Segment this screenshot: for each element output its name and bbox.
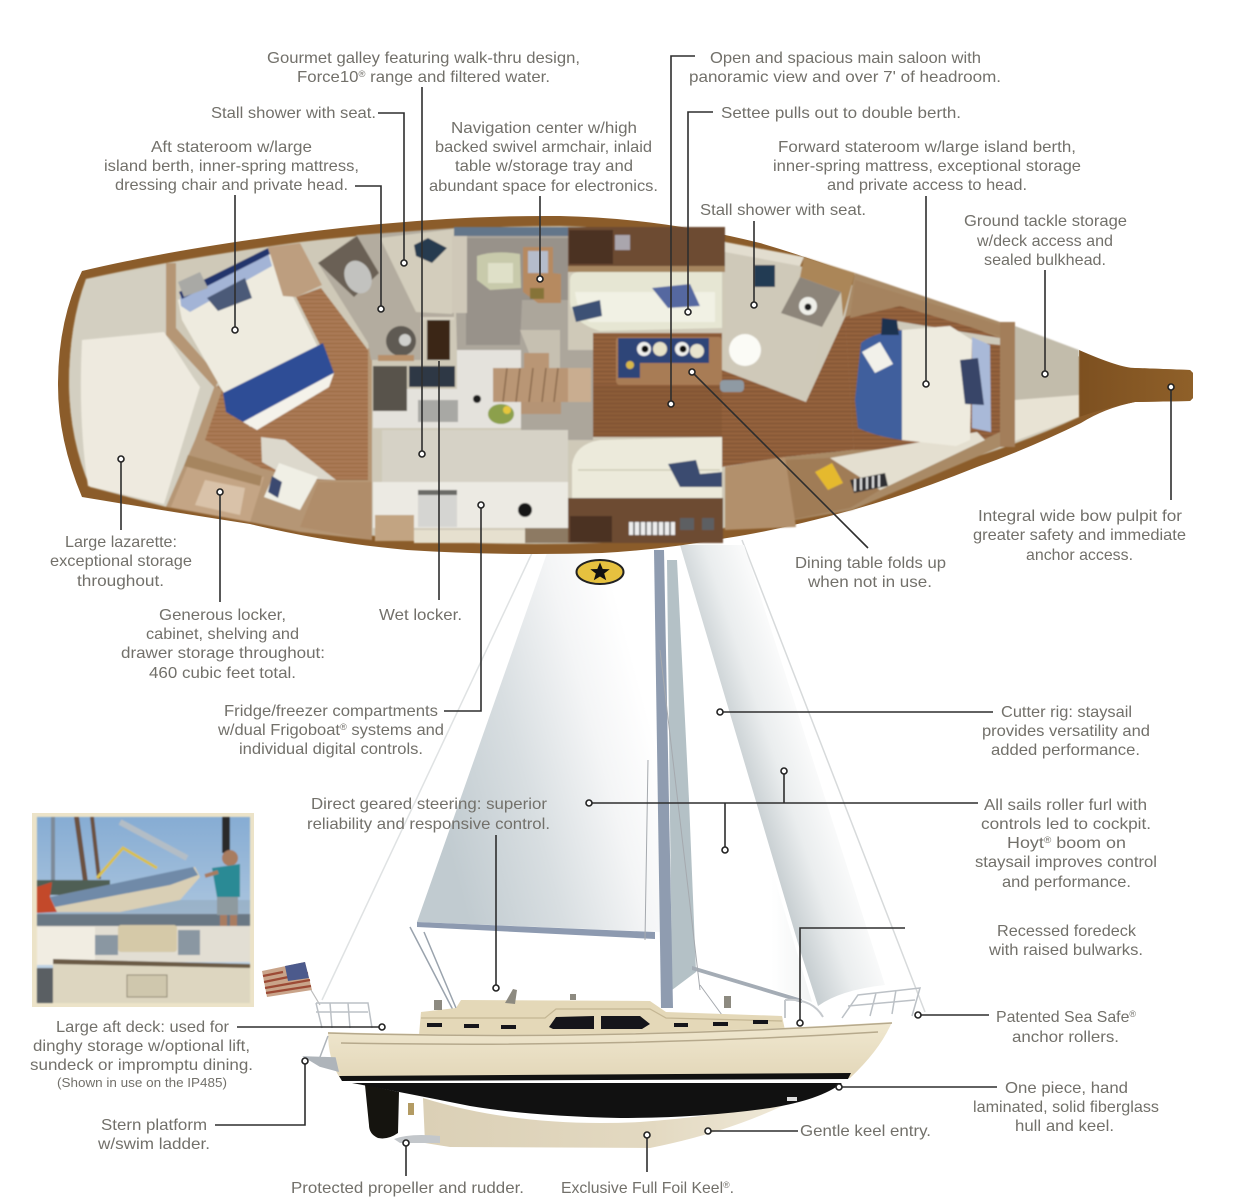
callout: cutter rig: Cutter rig: staysail: [1001, 704, 1132, 721]
transom: [53, 961, 250, 1003]
callout: roller furl sails: [586, 768, 1157, 891]
thruster ports: [787, 1097, 797, 1101]
fruit bowl: [488, 404, 514, 424]
callout: stall shower forward: Stall shower with seat.: [700, 202, 866, 219]
head compartment: [318, 228, 454, 361]
callout: main saloon: panoramic view and over 7' of headroom.: [689, 69, 1001, 86]
callout: stall shower aft: [211, 105, 407, 266]
saloon upper cabinets: [568, 227, 725, 272]
sink round: [386, 326, 416, 356]
toilet: [318, 236, 379, 297]
callout: settee: [685, 105, 961, 315]
mainsail: [417, 553, 662, 932]
callout: gourmet galley: ®: [359, 69, 366, 79]
bimini arm: [410, 927, 456, 1010]
callout: ground tackle: w/deck access and: [976, 233, 1113, 250]
bow pulpit deck: [1079, 350, 1193, 417]
callout: fridge freezer: ®: [340, 722, 347, 732]
chain locker: [1015, 326, 1079, 441]
lift arm: [120, 822, 187, 858]
callout: propeller and rudder: [291, 1140, 524, 1197]
aft locker: [171, 463, 264, 522]
hull outline: [58, 216, 1193, 554]
galley cabinets: [373, 366, 407, 411]
callout: navigation center: Navigation center w/high: [451, 120, 637, 137]
callout: aft deck: (Shown in use on the IP485): [57, 1075, 227, 1090]
topsides: [328, 1022, 892, 1078]
lower settee: [572, 437, 722, 498]
foredeck bulwark arc: [785, 1000, 823, 1018]
callout: one piece hull: hull and keel.: [1015, 1118, 1114, 1135]
chair: [264, 463, 318, 510]
mast: [654, 550, 673, 1008]
callout: navigation center: table w/storage tray and: [455, 158, 633, 175]
callout: aft stateroom: island berth, inner-spring mattress,: [104, 158, 359, 175]
callout: full foil keel: Exclusive Full Foil Keel: [561, 1180, 726, 1197]
callout: roller furl sails: ®: [1044, 835, 1052, 845]
side view boat hull: [262, 927, 920, 1148]
callout: lazarette: [50, 456, 192, 590]
callout: gourmet galley: Gourmet galley featuring walk-thru design,: [267, 50, 580, 67]
staysail boom: [692, 966, 802, 1003]
lower forward locker: [725, 457, 796, 530]
callout: cutter rig: added performance.: [991, 742, 1140, 759]
callout: direct steering: reliability and responsive control.: [307, 816, 550, 833]
bow rail: [842, 988, 920, 1018]
callout: forward stateroom: and private access to head.: [827, 177, 1027, 194]
callout: direct steering: Direct geared steering: superior: [311, 796, 548, 813]
pale floor below berth: [820, 432, 985, 490]
skeg plate: [394, 1135, 440, 1143]
callout: generous locker: 460 cubic feet total.: [149, 665, 296, 682]
callout: stern platform: Stern platform: [101, 1117, 207, 1134]
callout: main saloon: [668, 50, 1001, 407]
callout: gentle keel entry: Gentle keel entry.: [800, 1123, 931, 1140]
cockpit fittings: [434, 989, 731, 1010]
callout: navigation center: backed swivel armchair, inlaid: [435, 139, 652, 156]
yankee headsail: [680, 545, 885, 1006]
callout: fridge freezer: Fridge/freezer compartments: [224, 703, 438, 720]
blue blanket: [223, 343, 334, 422]
callout: bow pulpit: greater safety and immediate: [973, 527, 1186, 544]
callout: recessed foredeck: Recessed foredeck: [997, 923, 1137, 940]
callout: roller furl sails: and performance.: [1002, 874, 1131, 891]
callout: forward stateroom: inner-spring mattress, exceptional storage: [773, 158, 1081, 175]
forward cabin trim: [725, 273, 1000, 530]
callout: stern platform: [97, 1058, 308, 1153]
callout: dining table: [689, 369, 946, 591]
main saloon teak floor: [593, 317, 854, 467]
callout: wet locker: Wet locker.: [379, 607, 462, 624]
stern rail: [316, 1003, 372, 1028]
callout: aft stateroom: Aft stateroom w/large: [151, 139, 312, 156]
callout: one piece hull: One piece, hand: [1005, 1080, 1128, 1097]
dining table: [616, 337, 722, 385]
plan view interior: [58, 216, 1193, 554]
stern platform: [305, 1036, 338, 1071]
pale floor by chair: [261, 437, 336, 480]
main boom: [417, 922, 655, 939]
callout: one piece hull: [836, 1080, 1159, 1135]
callout: main saloon: Open and spacious main saloon with: [710, 50, 981, 67]
underbody: [352, 1083, 842, 1118]
aft pillows: [180, 252, 272, 312]
aft bulkhead trim: [166, 263, 372, 540]
companionway stairs: [493, 353, 591, 414]
callout: one piece hull: laminated, solid fiberglass: [973, 1099, 1159, 1116]
callout: generous locker: drawer storage throughout:: [121, 645, 325, 662]
callout: roller furl sails: controls led to cockpit.: [981, 816, 1151, 833]
keel: [423, 1094, 806, 1148]
forward berth: [855, 318, 991, 446]
callout: gourmet galley: [267, 50, 580, 457]
backstay: [322, 553, 532, 1000]
man: [222, 850, 238, 866]
galley lower counter: [373, 482, 568, 528]
callout: roller furl sails: staysail improves control: [975, 854, 1157, 871]
aft lower cabinet: [300, 482, 372, 540]
callout: forward stateroom: [773, 139, 1081, 387]
callout: bow pulpit: [973, 384, 1186, 564]
callout: recessed foredeck: with raised bulwarks.: [988, 942, 1143, 959]
callout: fridge freezer: w/dual Frigoboat: [218, 722, 336, 739]
deck line and cove stripe: [328, 1023, 892, 1044]
callout: full foil keel: [561, 1132, 734, 1197]
callout: gentle keel entry: [705, 1123, 931, 1140]
callout: generous locker: [121, 489, 325, 682]
callout: ground tackle: [964, 213, 1127, 377]
callout: navigation center: [429, 120, 658, 282]
callout: generous locker: cabinet, shelving and: [146, 626, 299, 643]
aft cabin teak floor: [196, 288, 368, 482]
callout: roller furl sails: All sails roller furl with: [984, 797, 1147, 814]
aft berth: [178, 248, 334, 430]
callout: lazarette: Large lazarette:: [65, 534, 177, 551]
callout: aft deck: [30, 1019, 385, 1090]
cabin top: [419, 1000, 786, 1035]
callout: anchor rollers: anchor rollers.: [1012, 1029, 1119, 1046]
callout: roller furl sails: boom on: [1051, 835, 1126, 852]
forestay: [742, 540, 925, 1012]
callout: dining table: Dining table folds up: [795, 555, 946, 572]
propeller: [408, 1103, 414, 1115]
staysail: [677, 557, 812, 1002]
sails and rig: [322, 540, 925, 1015]
callout: anchor rollers: [915, 1009, 1136, 1046]
spreader lines: [645, 650, 722, 1015]
windows: [427, 1016, 768, 1029]
navy stool: [414, 238, 447, 263]
callout: bow pulpit: anchor access.: [1026, 547, 1133, 564]
photo frame: [32, 813, 254, 1007]
yellow book: [815, 463, 843, 490]
sail logo star: [576, 560, 624, 584]
callout: anchor rollers: ®: [1129, 1009, 1136, 1019]
callout: ground tackle: Ground tackle storage: [964, 213, 1127, 230]
callout: stern platform: w/swim ladder.: [97, 1136, 210, 1153]
callout: fridge freezer: individual digital controls.: [239, 741, 423, 758]
callout: forward stateroom: Forward stateroom w/large island berth,: [778, 139, 1076, 156]
forward bulkhead: [1000, 322, 1015, 447]
callout: propeller and rudder: Protected propeller and rudder.: [291, 1180, 524, 1197]
callout: settee: Settee pulls out to double berth.: [721, 105, 961, 122]
callout: dining table: when not in use.: [807, 574, 932, 591]
callout: aft stateroom: dressing chair and private head.: [115, 177, 348, 194]
boot stripe: [339, 1073, 851, 1081]
callout: full foil keel: ®: [723, 1180, 730, 1190]
callout: ground tackle: sealed bulkhead.: [984, 252, 1106, 269]
forward head: [720, 242, 855, 402]
callout: cutter rig: provides versatility and: [982, 723, 1150, 740]
armchair: [477, 252, 521, 290]
callout: aft stateroom: [104, 139, 384, 333]
callout: stall shower forward: [700, 202, 866, 308]
wet locker: [427, 320, 450, 360]
callout: lazarette: exceptional storage: [50, 553, 192, 570]
callout: anchor rollers: Patented Sea Safe: [996, 1009, 1130, 1026]
callout: fridge freezer: [217, 502, 484, 758]
aft cabinet top: [268, 243, 322, 297]
callout: aft deck: dinghy storage w/optional lift,: [33, 1038, 250, 1055]
callout: gourmet galley: Force10: [297, 69, 356, 86]
cabin trim lines: [421, 1009, 782, 1021]
striped book: [850, 473, 888, 493]
callout: roller furl sails: Hoyt: [1007, 835, 1040, 852]
callout: lazarette: throughout.: [77, 573, 164, 590]
lazarette: [69, 265, 218, 507]
rudder: [365, 1085, 399, 1138]
callout: navigation center: abundant space for electronics.: [429, 178, 658, 195]
callout: recessed foredeck: [797, 923, 1143, 1026]
grey luff panel: [667, 560, 696, 990]
navigation table: [523, 247, 561, 303]
callout: cutter rig: [717, 704, 1150, 759]
dinghy: [50, 867, 200, 912]
callout: generous locker: Generous locker,: [159, 607, 286, 624]
saloon lower cabinets: [568, 498, 723, 543]
callout: fridge freezer: systems and: [347, 722, 444, 739]
callout: direct steering: [307, 796, 550, 991]
galley aisle: [382, 430, 568, 482]
interior base: [69, 226, 1079, 544]
callout: bow pulpit: Integral wide bow pulpit for: [978, 508, 1183, 525]
callout: gourmet galley: range and filtered water.: [365, 69, 550, 86]
galley counters: [373, 350, 521, 428]
flag: [262, 962, 320, 1005]
callout: aft deck: Large aft deck: used for: [56, 1019, 230, 1036]
saloon floor: [454, 233, 593, 440]
callout: stall shower aft: Stall shower with seat.: [211, 105, 376, 122]
upper settee: [570, 272, 722, 331]
photo: dinghy on aft deck: [32, 813, 254, 1007]
palms: [37, 880, 110, 895]
callout: full foil keel: .: [730, 1180, 734, 1197]
aft deck and boats: [37, 926, 250, 962]
callout: aft deck: sundeck or impromptu dining.: [30, 1057, 253, 1074]
